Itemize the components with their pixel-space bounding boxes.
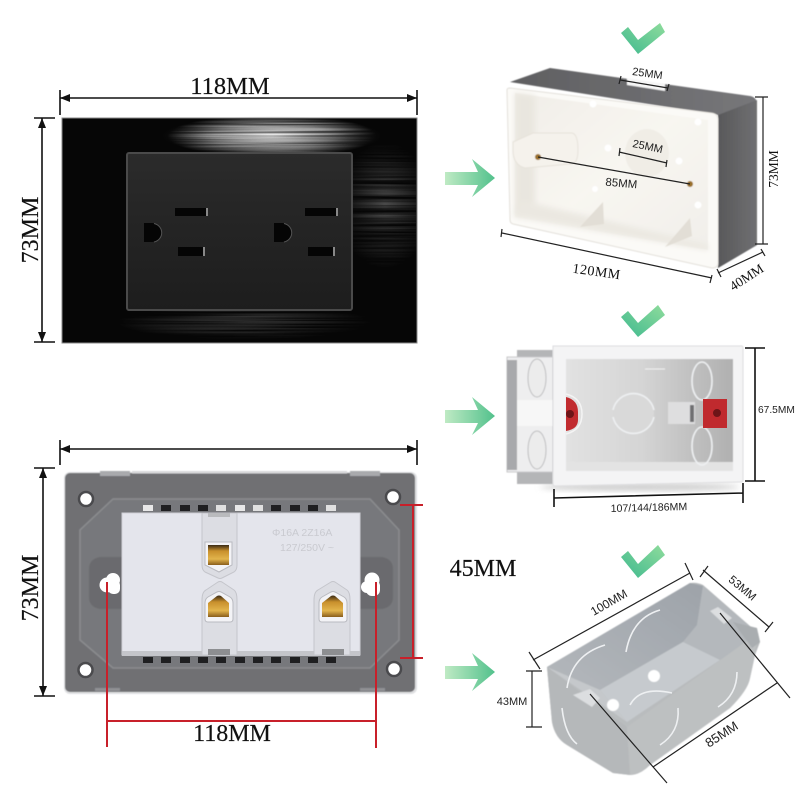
dimension: screw spacing 85MM: 85MM <box>605 177 638 191</box>
outlet: right <box>274 208 338 256</box>
module rating text: 127/250V ~ <box>280 542 334 554</box>
dimension: height 73MM <box>755 97 781 244</box>
metal box shell <box>547 583 760 775</box>
brushed black faceplate <box>62 116 417 343</box>
red dimension: 118MM <box>107 582 376 748</box>
brass screw terminals <box>205 542 347 622</box>
dimension: top width 118MM <box>60 73 417 115</box>
dimension: 85MM: 85MM <box>702 718 741 750</box>
check mark: metal box <box>621 545 665 578</box>
dimension: left height 73MM <box>18 118 55 342</box>
white terminal module <box>122 513 360 656</box>
terminal tabs rows <box>143 505 336 663</box>
dimension: width 107/144/186MM <box>554 483 743 515</box>
dimension: height 67.5MM <box>745 348 795 481</box>
dimension: notch 25MM <box>619 66 669 91</box>
dimension: 100MM <box>529 563 693 669</box>
dimension: notch 25MM: 25MM <box>631 66 663 82</box>
dimension: top width 118MM: 118MM <box>190 73 270 100</box>
dimension: top width line <box>60 440 417 465</box>
dimension: 100MM: 100MM <box>588 586 630 619</box>
panel: metal box <box>497 563 790 783</box>
arrow: to plastic box <box>445 397 495 435</box>
dimension: screw spacing 85MM <box>538 157 690 191</box>
dimension: left height 73MM: 73MM <box>18 555 44 621</box>
module rating text: Φ16A 2Z16A <box>272 527 332 539</box>
keyhole slots <box>100 572 380 596</box>
red dimension: 45MM <box>400 505 516 658</box>
check mark: surface box <box>621 23 665 54</box>
arrow: to metal box <box>445 653 495 691</box>
socket insert panel <box>127 153 352 310</box>
dimension: width 120MM: 120MM <box>571 262 622 283</box>
check mark: plastic box <box>621 305 665 337</box>
red dimension: 118MM: 118MM <box>193 721 271 747</box>
dimension: left height 73MM: 73MM <box>18 197 44 263</box>
red screw blocks <box>566 394 727 434</box>
dimension: width 107/144/186MM: 107/144/186MM <box>610 501 687 515</box>
dimension: 43MM: 43MM <box>497 696 527 708</box>
arrow: to surface box <box>445 159 495 197</box>
panel: plastic flush box <box>507 346 795 515</box>
dimension: 85MM <box>590 613 790 783</box>
dimension: hole 25MM: 25MM <box>631 138 664 156</box>
dimension: height 67.5MM: 67.5MM <box>758 405 795 416</box>
white frame and inner cavity <box>553 346 743 486</box>
dimension: 53MM: 53MM <box>726 574 758 604</box>
grey back plate <box>64 471 417 694</box>
panel: front of black socket <box>18 73 417 343</box>
panel: back of socket <box>18 440 516 748</box>
dimension: depth 40MM <box>717 249 766 294</box>
white box front rim and cavity <box>507 88 718 268</box>
panel: surface mount box <box>501 66 781 294</box>
knockouts <box>562 610 737 745</box>
dimension: depth 40MM: 40MM <box>727 261 766 294</box>
red dimension: 45MM: 45MM <box>450 556 516 582</box>
box side fittings <box>507 350 740 491</box>
dimension: left height 73MM <box>18 468 55 696</box>
dimension: 43MM <box>497 671 542 727</box>
dimension: width 120MM <box>501 229 712 283</box>
dimension: height 73MM: 73MM <box>766 150 781 188</box>
corner mounting holes <box>78 490 401 677</box>
grey box body <box>510 68 757 268</box>
outlet: left <box>144 208 208 256</box>
dimension: hole 25MM <box>619 138 667 167</box>
dimension: 53MM <box>700 566 773 632</box>
module rating text <box>272 527 334 554</box>
